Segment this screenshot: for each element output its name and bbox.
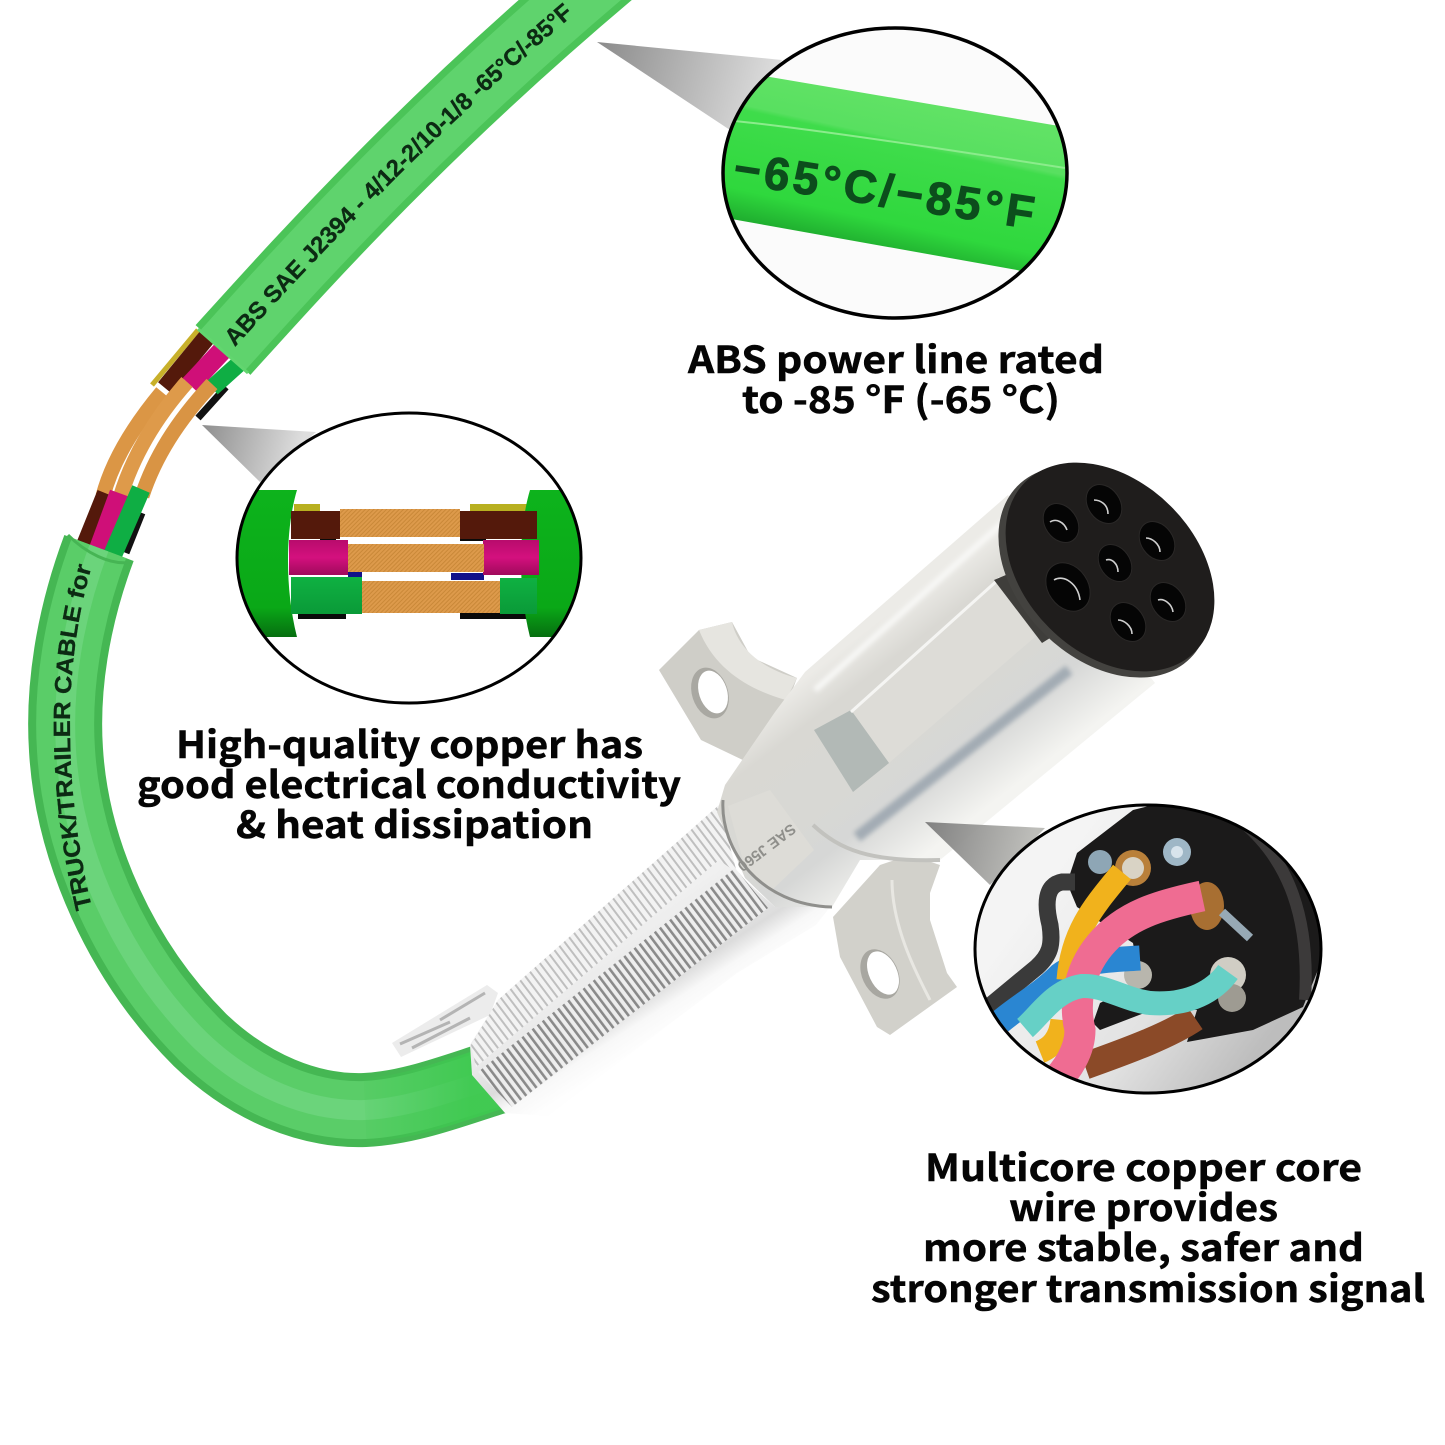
exposed cable wires xyxy=(76,326,252,575)
upper cable jacket xyxy=(196,0,632,375)
pink wire xyxy=(1052,896,1202,1085)
yellow wire xyxy=(1040,872,1122,1052)
callout pointer: multicore xyxy=(925,822,1045,885)
caption: temperature rating xyxy=(687,330,1104,424)
callout pointer: copper xyxy=(202,425,316,482)
left cap xyxy=(237,490,297,637)
caption: copper conductivity: High-quality copper has xyxy=(176,715,643,769)
connector collar xyxy=(723,790,940,907)
connector socket face xyxy=(957,421,1256,719)
cable print: upper: ABS SAE J2394 - 4/12-2/10-1/8 -65°C/-85°F xyxy=(227,2,570,347)
body highlight streak xyxy=(857,670,1069,837)
right cap xyxy=(521,490,585,637)
callout circle: copper conductors xyxy=(237,413,585,703)
screws and washers xyxy=(1088,838,1250,1012)
caption: copper conductivity: & heat dissipation xyxy=(236,795,593,849)
callout circle: temperature rating xyxy=(700,28,1090,318)
cable print: lower: TRUCK/TRAILER CABLE for xyxy=(54,564,91,912)
flat plate xyxy=(851,578,1035,763)
teal wire xyxy=(1025,972,1228,1028)
gasket notch xyxy=(994,572,1058,643)
callout pointer: temperature xyxy=(597,42,782,130)
caption: temperature rating: ABS power line rated xyxy=(687,330,1104,384)
connector body xyxy=(717,495,1155,907)
caption: multicore wire: Multicore copper core xyxy=(925,1138,1362,1192)
caption: multicore wire: more stable, safer and xyxy=(923,1218,1364,1272)
caption: copper conductivity: good electrical conductivity xyxy=(137,755,681,809)
caption: temperature rating: to -85 °F (-65 °C) xyxy=(742,370,1060,424)
brown wire xyxy=(1085,1018,1195,1066)
threaded spring tube xyxy=(470,805,830,1116)
blue wire xyxy=(1000,958,1140,1022)
jacket cut ends xyxy=(68,329,248,563)
lower mounting lug xyxy=(833,855,957,1035)
upper mounting lug xyxy=(659,622,797,762)
wire terminal pin xyxy=(392,985,498,1057)
caption: copper conductivity xyxy=(137,715,681,849)
plate end recess xyxy=(814,710,889,792)
caption: multicore wire xyxy=(871,1138,1425,1313)
callout circle: multicore wiring xyxy=(975,800,1326,1093)
lower cable jacket xyxy=(28,535,506,1148)
connector collar: SAE J560 xyxy=(734,820,799,875)
caption: multicore wire: stronger transmission signal xyxy=(871,1259,1425,1313)
caption: multicore wire: wire provides xyxy=(1009,1178,1278,1232)
temperature print: −65°C/−85°F xyxy=(730,141,1038,239)
